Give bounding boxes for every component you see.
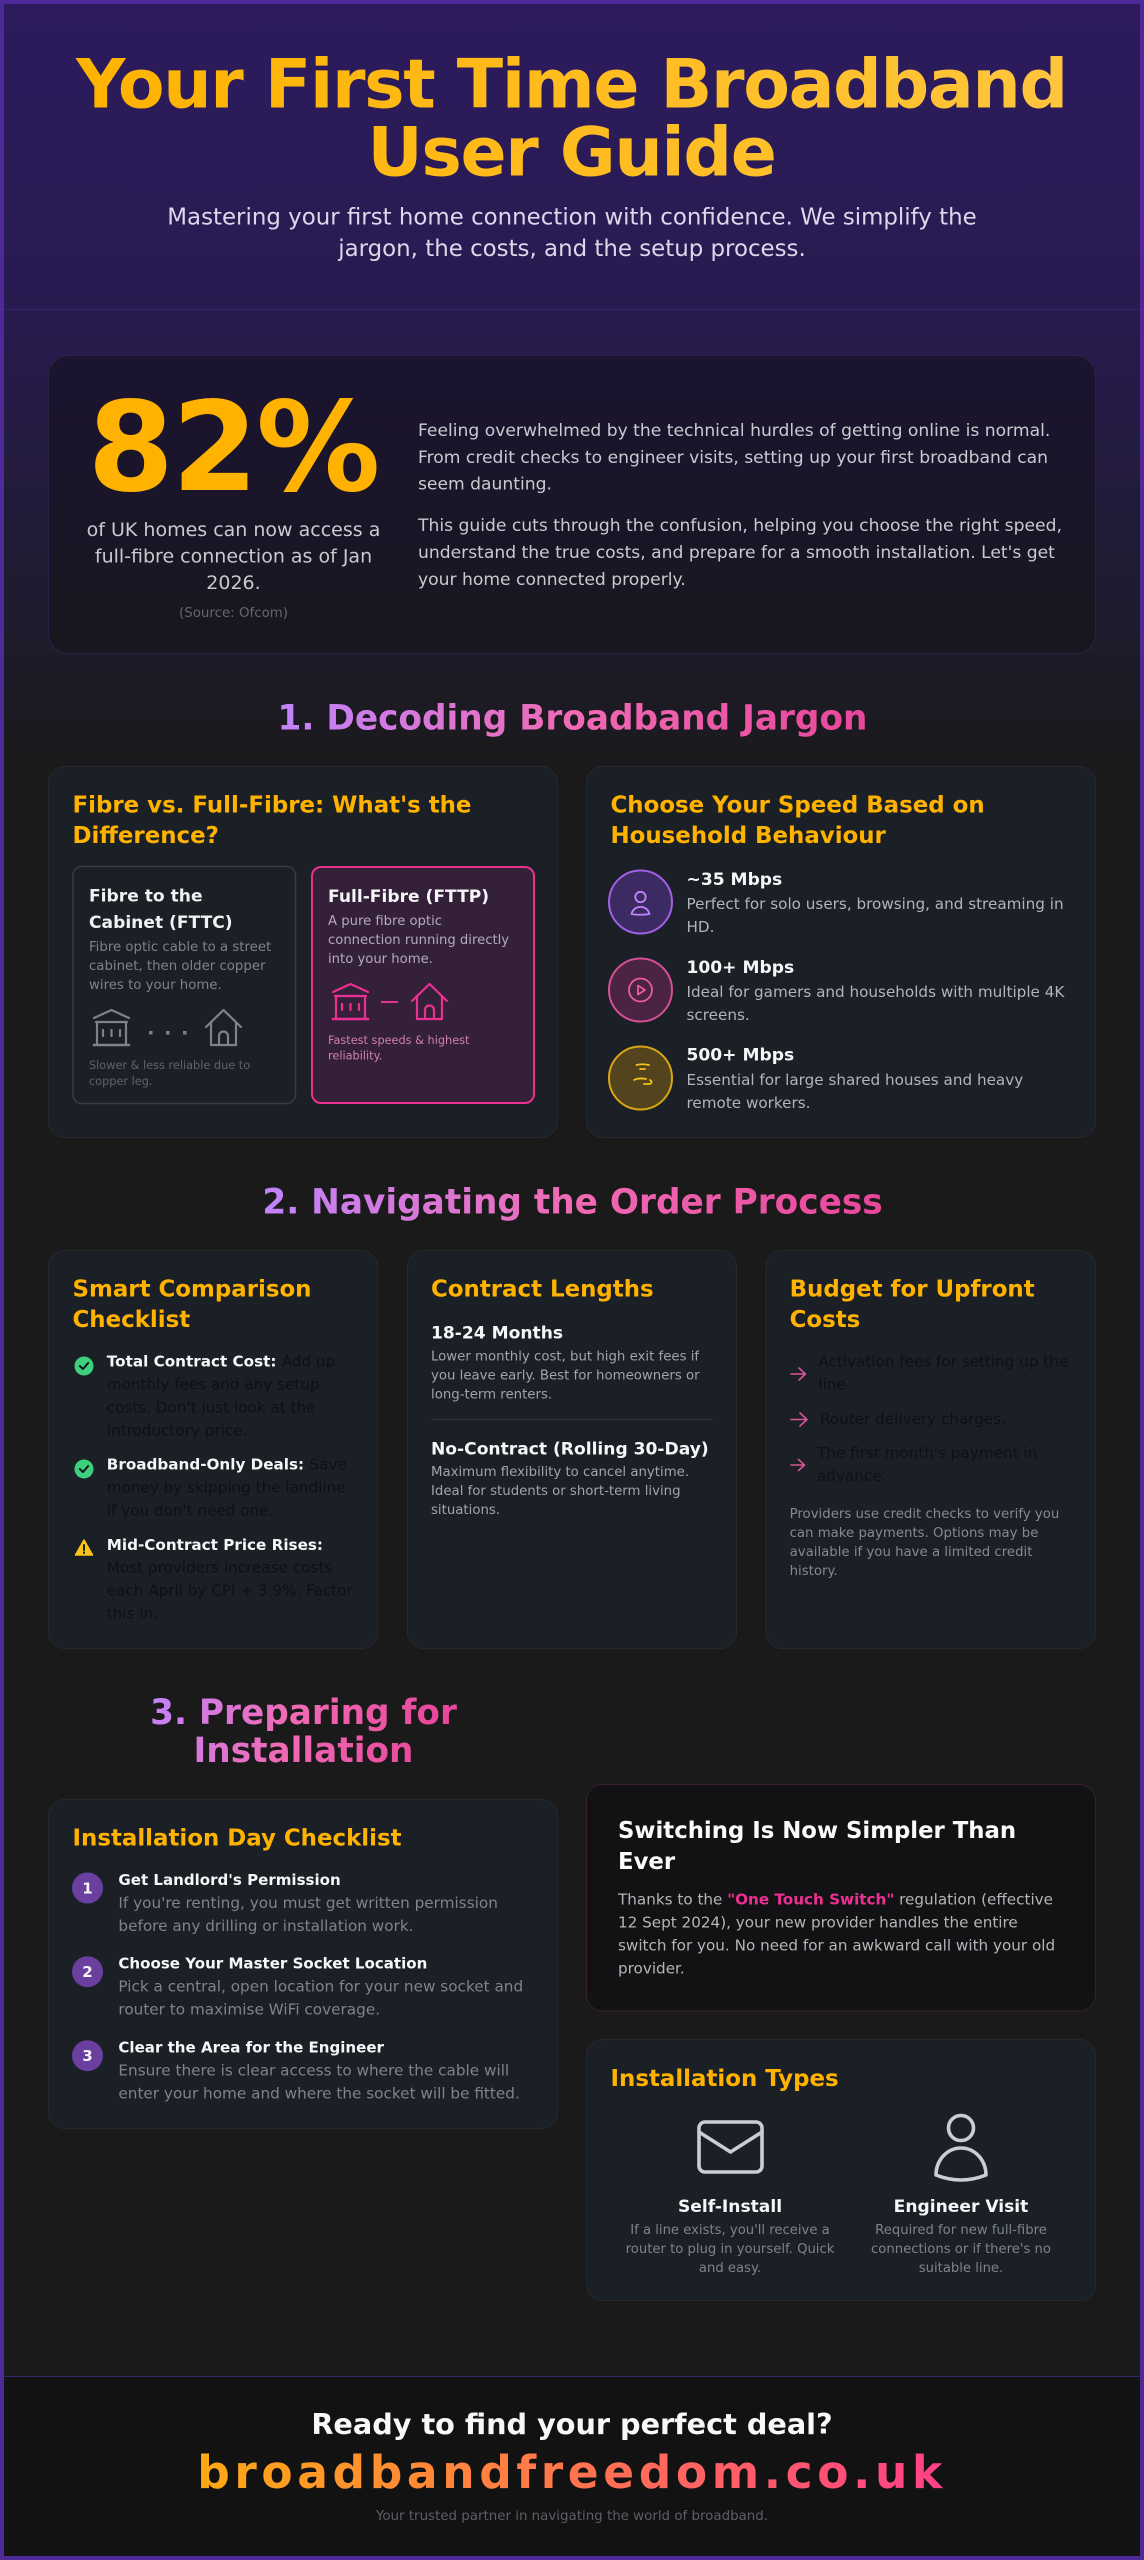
checklist item: total cost: monthly fees and any setup	[107, 1376, 320, 1394]
credit note: available if you have a limited credit	[790, 1545, 1032, 1560]
credit note: can make payments. Options may be	[790, 1526, 1038, 1541]
checklist item: price rises: this in.	[107, 1604, 158, 1622]
icon: house	[412, 984, 447, 1019]
checklist item: total cost: introductory price.	[107, 1422, 247, 1440]
checklist item: price rises: each April by CPI + 3.9%. Factor	[107, 1582, 353, 1600]
step 2: 2	[82, 1963, 93, 1981]
step 3: 3	[82, 2047, 93, 2065]
card heading: Difference?	[72, 823, 219, 849]
speed row: 100+ Mbps: Ideal for gamers and households with multiple 4K	[686, 983, 1065, 1001]
callout body: switch for you. No need for an awkward call with your old	[618, 1936, 1055, 1954]
step 1: If you're renting, you must get written permission	[118, 1894, 498, 1912]
section heading 2: 2. Navigating the Order Process	[262, 1182, 883, 1222]
contract option: no-contract: Maximum flexibility to cancel anytime.	[431, 1465, 689, 1480]
card heading: Installation Day Checklist	[72, 1826, 402, 1852]
title: User Guide	[367, 114, 776, 192]
contract option: 18-24 months: Lower monthly cost, but high exit fees if	[431, 1350, 699, 1365]
cost item: activation	[791, 1353, 1068, 1394]
step 2: router to maximise WiFi coverage.	[118, 2001, 380, 2019]
option: self-install: and easy.	[699, 2261, 761, 2276]
speed row: 100+ Mbps: 100+ Mbps	[686, 958, 794, 978]
sub-panel: FTTC: Cabinet (FTTC)	[89, 913, 233, 933]
intro text: seem daunting.	[418, 474, 552, 494]
checklist item: price rises: Mid-Contract Price Rises:	[107, 1536, 323, 1554]
option: engineer visit: Engineer Visit	[894, 2197, 1028, 2217]
footer tagline: Your trusted partner in navigating the world of broadband.	[375, 2509, 768, 2524]
checklist item: broadband only: Broadband-Only Deals: Save	[107, 1456, 347, 1474]
sub-panel: FTTP: into your home.	[328, 952, 433, 967]
contract option: 18-24 months: long-term renters.	[431, 1388, 552, 1403]
speed row: 500+ Mbps: Essential for large shared houses and heavy	[686, 1071, 1023, 1089]
sub-panel: FTTP: reliability.	[328, 1050, 382, 1062]
contract option: 18-24 months: 18-24 Months	[431, 1324, 563, 1344]
callout body: 12 Sept 2024), your new provider handles the entire	[618, 1913, 1018, 1931]
cost item: first month	[791, 1444, 1037, 1485]
intro text: your home connected properly.	[418, 570, 686, 590]
panel: switching callout	[586, 1784, 1096, 2011]
panel: upfront costs	[766, 1250, 1096, 1648]
header	[0, 46, 1144, 310]
contract option: no-contract: No-Contract (Rolling 30-Day)	[431, 1439, 709, 1459]
sub-panel: FTTC: Fibre to the	[89, 886, 203, 906]
footer call to action: Ready to find your perfect deal?	[311, 2407, 833, 2441]
checklist item: price rises: Most providers increase costs	[107, 1559, 332, 1577]
speed row: 500+ Mbps: remote workers.	[686, 1094, 811, 1112]
icon: building	[94, 1010, 129, 1045]
icon: solid fibre link	[381, 1001, 398, 1003]
speed row: 35 Mbps: HD.	[686, 918, 714, 936]
cost item: activation: Activation fees for setting up the	[818, 1353, 1068, 1371]
footer url: broadbandfreedom.co.uk	[197, 2446, 947, 2499]
contract option: 18-24 months	[431, 1324, 700, 1403]
icon: house	[206, 1010, 241, 1045]
icon: building	[333, 984, 368, 1019]
option: self-install: Self-Install	[678, 2197, 782, 2217]
sub-panel: FTTP: A pure fibre optic	[328, 914, 442, 929]
panel: installation day checklist	[48, 1800, 558, 2128]
step 3: Clear the Area for the Engineer	[118, 2039, 385, 2057]
step 2: Choose Your Master Socket Location	[118, 1955, 427, 1973]
option: engineer visit: Required for new full-fibre	[875, 2223, 1047, 2238]
cost item: first month: The first month's payment in	[816, 1444, 1037, 1462]
intro text: understand the true costs, and prepare for a smooth installation. Let's get	[418, 543, 1055, 563]
card heading: Checklist	[72, 1307, 190, 1333]
sub-panel: FTTC: Fibre optic cable to a street	[89, 940, 271, 955]
speed row: 35 Mbps: ~35 Mbps	[686, 870, 782, 890]
sub-panel: FTTC: copper leg.	[89, 1075, 153, 1088]
checklist item: broadband only: if you don't need one.	[107, 1502, 273, 1520]
card heading: Costs	[790, 1307, 860, 1333]
step 1: before any drilling or installation work.	[118, 1917, 414, 1935]
cost item: activation: line.	[818, 1376, 851, 1394]
section heading 3: Installation	[194, 1731, 413, 1771]
callout body: provider.	[618, 1959, 685, 1977]
sub-panel: FTTC: wires to your home.	[89, 978, 222, 993]
step 3	[72, 2039, 520, 2103]
card heading: Contract Lengths	[431, 1276, 654, 1302]
checklist item: total cost	[74, 1353, 335, 1440]
section heading 3: 3. Preparing for	[150, 1693, 457, 1733]
intro text: From credit checks to engineer visits, setting up your first broadband can	[418, 448, 1048, 468]
contract option: no-contract: Ideal for students or short-term living	[431, 1484, 681, 1499]
checklist item: total cost: costs. Don't just look at the	[107, 1399, 315, 1417]
card heading: Installation Types	[610, 2066, 839, 2092]
contract option: no-contract	[431, 1439, 709, 1518]
speed row: 35 Mbps	[609, 870, 1064, 936]
panel: fibre vs full-fibre	[48, 766, 558, 1138]
callout heading: Switching Is Now Simpler Than	[618, 1818, 1016, 1844]
panel: speed by household	[586, 766, 1096, 1138]
speed row: 100+ Mbps	[609, 958, 1065, 1024]
sub-panel: FTTP: connection running directly	[328, 933, 509, 948]
big stat 82%: 82%	[88, 376, 378, 520]
cost item: first month: advance.	[817, 1467, 886, 1485]
sub-panel: FTTP: Full-Fibre (FTTP)	[328, 887, 489, 907]
checklist item: price rises	[76, 1536, 353, 1622]
footer	[0, 2376, 1144, 2560]
speed row: 500+ Mbps: 500+ Mbps	[686, 1046, 794, 1066]
section heading 1: 1. Decoding Broadband Jargon	[278, 698, 867, 738]
subtitle: jargon, the costs, and the setup process.	[337, 236, 806, 262]
step 1: 1	[82, 1880, 93, 1898]
option: self-install: If a line exists, you'll receive a	[630, 2223, 830, 2238]
card heading: Budget for Upfront	[790, 1276, 1035, 1302]
panel: intro stat	[48, 356, 1096, 654]
panel: installation types	[586, 2040, 1096, 2300]
step 3: Ensure there is clear access to where the cable will	[118, 2062, 509, 2080]
checklist item: broadband only	[74, 1456, 347, 1520]
checklist item: total cost: Total Contract Cost: Add up	[107, 1353, 335, 1371]
option: engineer visit: suitable line.	[919, 2261, 1003, 2276]
speed row: 500+ Mbps	[609, 1046, 1023, 1112]
card heading: Choose Your Speed Based on	[610, 792, 985, 818]
stat description: of UK homes can now access a	[87, 519, 380, 541]
intro text: This guide cuts through the confusion, helping you choose the right speed,	[417, 516, 1062, 536]
intro text: Feeling overwhelmed by the technical hurdles of getting online is normal.	[418, 421, 1050, 441]
stat source: (Source: Ofcom)	[179, 606, 288, 621]
card heading: Smart Comparison	[72, 1276, 311, 1302]
panel: contract lengths	[408, 1250, 736, 1648]
option: engineer visit	[871, 2116, 1051, 2276]
contract option: no-contract: situations.	[431, 1503, 500, 1518]
option: self-install: router to plug in yourself. Quick	[626, 2242, 835, 2257]
step 2: Pick a central, open location for your new socket and	[118, 1978, 523, 1996]
checklist item: broadband only: money by skipping the landline	[107, 1479, 346, 1497]
callout body: Thanks to the "One Touch Switch" regulation (effective	[618, 1890, 1053, 1908]
stat description: 2026.	[206, 572, 261, 594]
speed row: 35 Mbps: Perfect for solo users, browsing, and streaming in	[686, 895, 1064, 913]
icon: dotted copper link	[149, 1031, 186, 1034]
panel: smart comparison checklist	[48, 1250, 378, 1648]
cost item: router delivery: Router delivery charges.	[820, 1410, 1006, 1428]
callout heading: Ever	[618, 1849, 676, 1875]
speed row: 100+ Mbps: screens.	[686, 1006, 750, 1024]
card heading: Fibre vs. Full-Fibre: What's the	[72, 792, 471, 818]
sub-panel: FTTP	[312, 867, 534, 1103]
option: engineer visit: connections or if there's no	[871, 2242, 1051, 2257]
subtitle: Mastering your first home connection with confidence. We simplify the	[167, 204, 977, 230]
credit note: history.	[790, 1564, 838, 1579]
step 1: Get Landlord's Permission	[118, 1871, 341, 1889]
option: self-install	[626, 2122, 835, 2276]
card heading: Household Behaviour	[610, 823, 887, 849]
step 3: enter your home and where the socket will be fitted.	[118, 2085, 520, 2103]
sub-panel: FTTC	[73, 866, 296, 1104]
step 1	[72, 1871, 498, 1935]
stat description: full-fibre connection as of Jan	[95, 546, 372, 568]
step 2	[72, 1955, 523, 2019]
title: Your First Time Broadband	[75, 46, 1067, 124]
credit note: Providers use credit checks to verify you	[790, 1507, 1059, 1522]
contract option: 18-24 months: you leave early. Best for homeowners or	[431, 1369, 700, 1384]
sub-panel: FTTP: Fastest speeds & highest	[328, 1034, 470, 1047]
sub-panel: FTTC: cabinet, then older copper	[89, 959, 266, 974]
sub-panel: FTTC: Slower & less reliable due to	[89, 1059, 250, 1072]
